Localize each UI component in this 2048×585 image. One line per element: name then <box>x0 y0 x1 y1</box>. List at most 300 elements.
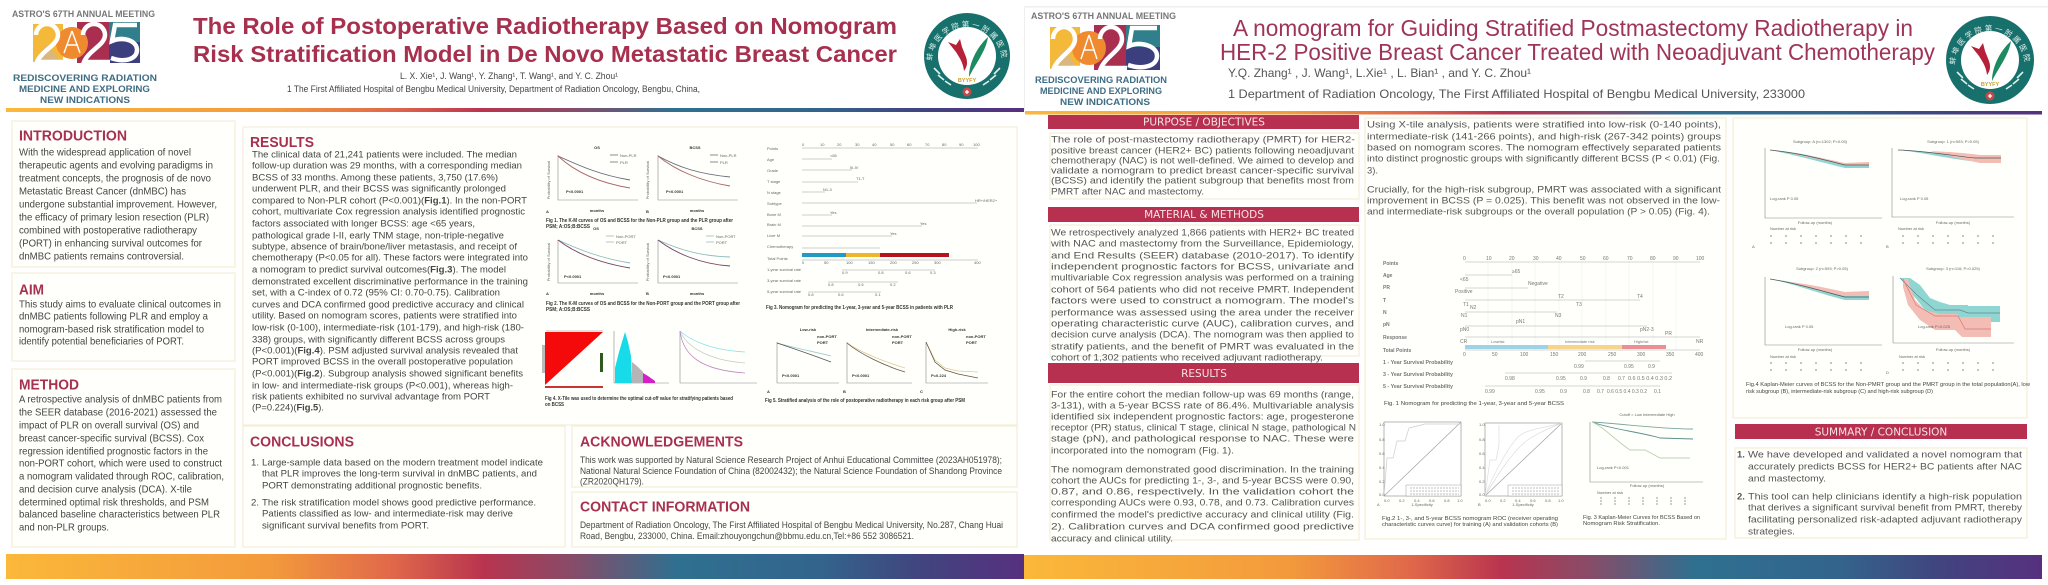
text: introduction body: treatment concepts, the prognosis of de novo <box>19 174 211 184</box>
text: results left body: accuracy and clinical utility. <box>1051 532 1173 544</box>
chart: nomogram poster 2: pN0 <box>1460 327 1469 333</box>
chart: nomogram poster 2: ≥65 <box>1512 269 1521 275</box>
chart: figure 2 KM curves: P<0.0001 <box>564 274 582 279</box>
text: summary body: 2. <box>1737 490 1745 502</box>
text: middle results body: Crucially, for the high-risk subgroup, PMRT was associated with a significant <box>1367 184 1721 194</box>
chart: figure 1 KM curves: BCSS <box>689 145 701 150</box>
chart: figure 3 nomogram: Bone M <box>767 212 781 217</box>
text: purpose body: (BCSS) and identify the patient subgroup that benefits most from <box>1051 174 1354 186</box>
chart: KM total population A: Follow-up (months) <box>1798 220 1833 225</box>
chart: nomogram poster 2: 1 - Year Survival Probability <box>1383 360 1453 366</box>
text: summary body <box>1737 448 2022 536</box>
text: results body: risk patients exhibited no survival advantage from PORT <box>252 392 490 402</box>
panel: results poster 1 <box>243 127 1017 425</box>
text: methods body <box>1050 226 1354 362</box>
chart: nomogram poster 2: N1 <box>1461 313 1468 319</box>
chart: nomogram poster 2: pN1 <box>1516 319 1525 325</box>
chart: figure 3 nomogram: T1-T <box>856 176 865 181</box>
icon: university emblem left <box>924 13 1010 99</box>
text: aim body: This study aims to evaluate clinical outcomes in <box>19 300 221 310</box>
text: acknowledgements body: National Natural Science Foundation of China (82002432); the Natural Science Foundation of Shandong Province <box>580 466 1002 477</box>
chart: figure 1 KM curves: months <box>690 208 705 213</box>
authors <box>287 71 700 94</box>
chart: figure 5 stratified KM: PORT <box>966 340 978 345</box>
text: middle results body: and intermediate-risk subgroups or the overall population (P > 0.05) (Fig. 4). <box>1367 206 1710 216</box>
text: aim body <box>19 300 221 348</box>
text: purpose body: PMRT after NAC and mastectomy. <box>1051 186 1204 196</box>
chart: figure 3 nomogram: Fig 3. Nomogram for predicting the 1-year, 3-year and 5-year BCSS in patients with PLR <box>766 305 953 311</box>
chart: KM high-risk D <box>1886 266 2014 375</box>
text: method body: breast cancer-specific survival (BCSS). Cox <box>19 434 204 444</box>
text: results body: (P=0.224)(Fig.5). <box>252 402 324 414</box>
chart: KM high-risk D: D <box>1886 370 1889 375</box>
chart: nomogram poster 2: 0.8 <box>1603 376 1610 382</box>
text: results body: utility. Based on nomogram scores, patients were stratified into <box>252 310 517 322</box>
text: methods body: cohort of 1,302 patients who received adjuvant radiotherapy. <box>1051 352 1323 362</box>
text: results body: curves and DCA confirmed good predictive accuracy and clinical <box>252 300 524 310</box>
text: aim body: identify potential beneficiaries of PORT. <box>19 336 184 348</box>
text: method body: a nomogram validated through ROC, calibration, <box>19 472 224 482</box>
chart: figure 5 stratified KM: non-PORT <box>892 334 912 339</box>
text: results body: demonstrated excellent discriminative performance in the training <box>252 276 528 288</box>
chart: ROC curves: 0.0 <box>1384 498 1390 503</box>
chart: figure 3 nomogram: HR+/HER2+ <box>975 198 998 203</box>
chart: figure 3 nomogram: N1-3 <box>823 187 832 192</box>
text: conclusions body: 2. <box>251 498 259 508</box>
text: method body: and decision curve analysis (DCA). X-tile <box>19 484 192 496</box>
chart: figure 2 KM curves: A <box>546 291 549 296</box>
chart: figure 3 KM risk strata: Follow-up (months) <box>1630 483 1665 488</box>
text: summary body: This tool can help clinicians identify a high-risk population <box>1748 490 2022 502</box>
chart: figure 3 KM risk strata: Cutoff = Low Intermediate High <box>1619 412 1675 417</box>
text: results body: a nomogram to predict survival outcomes(Fig.3). The model <box>252 264 506 276</box>
chart: figure 3 nomogram: Yes <box>920 221 927 226</box>
chart: ROC curves: A <box>1377 502 1380 507</box>
chart: figure 2 KM curves: PSM; A:OS;B:BCSS <box>546 307 591 313</box>
chart: figure 3 KM risk strata: Number at risk <box>1597 490 1623 495</box>
text: methods body: factors were used to construct a nomogram. The model's <box>1051 294 1354 306</box>
text: methods body: We retrospectively analyzed 1,866 patients with HER2+ BC treated <box>1051 226 1354 238</box>
caption: figure 4: Fig.4 Kaplan-Meier curves of BCSS for the Non-PMRT group and the PMRT group in the total population(A), low <box>1746 382 2031 388</box>
text: introduction body: undergone substantial improvement. However, <box>19 200 217 210</box>
chart: ROC curves: 0.0 <box>1479 492 1485 497</box>
text: method body: the SEER database (2016-2021) assessed the <box>19 408 217 418</box>
chart: figure 3 nomogram: Age <box>767 157 775 162</box>
chart: figure 2 KM curves: OS <box>593 226 599 231</box>
chart: nomogram poster 2: 0.95 <box>1624 364 1634 370</box>
chart: figure 5 stratified KM: non-PORT <box>966 334 986 339</box>
text: method body: and non-PLR groups. <box>19 522 109 534</box>
chart: figure 3 nomogram: N stage <box>767 190 782 195</box>
chart: figure 5 stratified KM: Fig 5. Stratified analysis of the role of postoperative radiotherapy in each risk group after PSM <box>765 398 965 404</box>
chart: figure 3 nomogram: <65 <box>830 153 838 158</box>
chart: KM high-risk D: Log-rank P=0.025 <box>1918 324 1951 329</box>
text: results body: subtype, absence of brain/bone/liver metastasis, and receipt of <box>252 242 517 252</box>
section: summary / conclusion <box>1735 424 2027 538</box>
chart: nomogram poster 2: CR <box>1460 339 1468 345</box>
text: purpose body <box>1051 134 1355 196</box>
text: conclusions body <box>251 458 543 532</box>
text: results body: BCSS of 33 months. Among these patients, 3,750 (17.6%) <box>252 172 498 184</box>
caption: figure 4 <box>1746 382 2031 395</box>
chart: figure 4 X-tile: Fig 4. X-Tile was used to determine the optimal cut-off value for stratifying patients based <box>545 396 733 402</box>
chart: ROC curves: 0.2 <box>1399 498 1405 503</box>
title <box>193 13 897 67</box>
text: summary body: and mastectomy. <box>1748 472 1826 484</box>
text: conclusions body: Patients classified as low- and intermediate-risk may derive <box>262 508 513 520</box>
text: results left body: 3-131), with a 5-year BCSS rate of 86.4%. Multivariable analysis <box>1051 400 1354 410</box>
text: results left body: The nomogram demonstrated good discrimination. In the training <box>1051 464 1354 474</box>
chart: figure 2 KM curves: Non-PORT <box>616 234 636 239</box>
chart: figure 3 nomogram: 0.6 <box>858 282 864 287</box>
chart: nomogram poster 2: 50 <box>1580 256 1586 262</box>
chart: figure 3 nomogram: 20 <box>837 142 842 147</box>
chart: figure 3 nomogram: 80 <box>942 142 947 147</box>
text: method body: impact of PLR on overall survival (OS) and <box>19 420 199 432</box>
title: A nomogram for Guiding Stratified Postmastectomy Radiotherapy in <box>1233 15 1913 41</box>
text: methods body: with NAC and mastectomy from the Surveillance, Epidemiology, <box>1050 238 1354 248</box>
chart: ROC curves: 0.4 <box>1479 465 1485 470</box>
chart: figure 3 nomogram: 0.8 <box>878 270 884 275</box>
chart: nomogram poster 2: 0.95 <box>1535 389 1545 395</box>
chart: figure 3 nomogram: III-IV <box>850 165 859 170</box>
chart: ROC curves: 1.0 <box>1457 498 1463 503</box>
text: purpose body: The role of post-mastectomy radiotherapy (PMRT) for HER2- <box>1051 134 1355 144</box>
chart: figure 5 stratified KM <box>765 327 988 404</box>
header bar: SUMMARY / CONCLUSION <box>1815 426 1947 438</box>
text: results left body: stage (pN), and pathological response to NAC. These were <box>1051 432 1354 444</box>
chart: figure 3 nomogram: 0.2 <box>890 282 896 287</box>
meeting logo right <box>1031 11 1176 108</box>
chart: figure 1 KM curves: months <box>590 208 605 213</box>
chart: figure 2 KM curves: Non-PORT <box>716 234 736 239</box>
meeting logo left: ASTRO'S 67TH ANNUAL MEETING <box>12 9 155 20</box>
text: middle results body: into distinct prognostic groups with significantly different BCSS (P < 0.01) (Fig. <box>1367 152 1720 164</box>
text: results body: compared to Non-PLR cohort (P<0.001)(Fig.1). In the non-PORT <box>252 196 527 206</box>
text: method body <box>19 394 224 534</box>
chart: figure 1 KM curves: P<0.0001 <box>566 189 584 194</box>
header bar <box>1048 363 1359 383</box>
chart: figure 3 nomogram: 60 <box>907 142 912 147</box>
chart: figure 5 stratified KM: Intermediate-risk <box>866 327 899 332</box>
text: methods body: decision curve analysis (DCA). The nomogram was then applied to <box>1051 328 1354 340</box>
text: summary body: We have developed and validated a novel nomogram that <box>1748 448 2022 460</box>
chart: figure 3 nomogram: 90 <box>959 142 964 147</box>
chart: ROC curves: 0.8 <box>1479 437 1485 442</box>
chart: nomogram poster 2: 0 <box>1463 256 1466 262</box>
text: results left body <box>1051 388 1356 544</box>
text: conclusions body: significant survival benefits from PORT. <box>262 520 429 532</box>
chart: figure 2 KM curves: months <box>690 291 705 296</box>
chart: figure 3 nomogram: 400 <box>974 260 981 265</box>
chart: figure 3 nomogram: 0.8 <box>828 282 834 287</box>
chart: nomogram poster 2: 0.9 <box>1648 364 1655 370</box>
chart: figure 3 nomogram: Yes <box>830 210 837 215</box>
authors: L. X. Xie¹, J. Wang¹, Y. Zhang¹, T. Wang¹, and Y. C. Zhou¹ <box>400 71 618 81</box>
chart: nomogram poster 2: 100 <box>1696 256 1705 262</box>
chart: ROC curves <box>1377 422 1564 528</box>
chart: nomogram poster 2: Negative <box>1528 281 1548 287</box>
chart: nomogram poster 2: Fig. 1 Nomogram for predicting the 1-year, 3-year and 5-year BCSS <box>1384 401 1564 407</box>
text: aim body: dnMBC patients following PLR and employ a <box>19 312 208 322</box>
chart: nomogram poster 2: 60 <box>1603 256 1609 262</box>
icon: university emblem left: 蚌埠医学院第一附属医院 <box>926 20 1008 60</box>
text: introduction body: combined with postoperative radiotherapy <box>19 226 198 236</box>
icon: university emblem right: 蚌埠医学院第一附属医院 <box>1948 24 2030 64</box>
text: middle results body: improvement in BCSS (P = 0.025). This benefit was not observed in the low- <box>1367 194 1720 206</box>
chart: figure 3 nomogram: T stage <box>767 179 781 184</box>
text: results left body: For the entire cohort the median follow-up was 69 months (range, <box>1051 388 1354 400</box>
chart: nomogram poster 2: 0.95 <box>1556 376 1566 382</box>
text: contact body: Road, Bengbu, 233000, China. Email:zhouyongchun@bbmu.edu.cn,Tel:+86 552 3086521. <box>580 531 914 542</box>
chart: KM total population A: A <box>1752 244 1755 249</box>
chart: KM intermediate-risk C: Log-rank P 0.05 <box>1785 324 1814 329</box>
chart: figure 3 nomogram: 250 <box>912 260 919 265</box>
chart: ROC curves: 0.2 <box>1500 498 1506 503</box>
chart: figure 5 stratified KM: A <box>767 389 770 394</box>
chart: ROC curves: 0.4 <box>1414 498 1420 503</box>
text: results body: underwent PLR, and their BCSS was significantly prolonged <box>252 184 506 194</box>
poster 2 header <box>1024 6 2048 110</box>
text: results body: 338) groups, with significantly different BCSS across groups <box>252 334 505 346</box>
chart: nomogram poster 2: 5 - Year Survival Probability <box>1383 384 1453 390</box>
panel: method <box>12 369 235 547</box>
chart: figure 3 nomogram: 40 <box>872 142 877 147</box>
header bar: PURPOSE / OBJECTIVES <box>1143 116 1265 128</box>
chart: ROC curves: 1-Specificity <box>1512 502 1534 507</box>
meeting logo left: NEW INDICATIONS <box>40 95 130 106</box>
chart: KM intermediate-risk C <box>1765 266 1882 370</box>
meeting logo left: REDISCOVERING RADIATION <box>13 73 157 84</box>
panel: middle results <box>1365 118 1726 539</box>
chart: figure 3 KM risk strata <box>1583 412 1703 527</box>
text: method body: regression identified prognostic factors in the <box>19 446 208 458</box>
text: conclusions body: that PLR improves the long-term survival in dnMBC patients, and <box>262 468 537 480</box>
text: results body: low-risk (0-100), intermediate-risk (101-179), and high-risk (180- <box>252 322 524 334</box>
text: contact body: Department of Radiation Oncology, The First Affiliated Hospital of Bengbu Medical University, No.287, Chang Huai <box>580 520 1003 531</box>
chart: nomogram poster 2: 10 <box>1486 256 1492 262</box>
chart: figure 2 KM curves: PORT <box>616 240 628 245</box>
text: acknowledgements body: This work was supported by Natural Science Research Project of Anhui Educational Committee (2023AH051978); <box>580 455 1002 466</box>
text: middle results body: intermediate-risk (141-266 points), and high-risk (267-342 points) groups <box>1367 130 1721 142</box>
chart: nomogram poster 2: 30 <box>1533 256 1539 262</box>
text: methods body: and End Results (SEER) database (2010-2017). To identify <box>1051 250 1354 260</box>
chart: figure 3 nomogram: 0.6 <box>838 292 844 297</box>
panel: right KM curves <box>1733 118 2031 418</box>
text: results body: follow-up duration was 29 months, with a corresponding median <box>252 160 522 172</box>
chart: figure 2 KM curves: Fig 2. The K-M curves of OS and BCSS for the Non-PORT group and the PORT group after <box>546 301 740 307</box>
panel: acknowledgements <box>572 426 1017 488</box>
text: summary body: facilitating personalized risk-adapted adjuvant radiotherapy <box>1748 514 2022 524</box>
chart: nomogram poster 2: 0.7 <box>1618 376 1625 382</box>
chart: KM low-risk B: Log-rank P 0.05 <box>1900 196 1929 201</box>
chart: nomogram poster 2: 3 - Year Survival Probability <box>1383 372 1453 378</box>
text: middle results body: 3). <box>1367 164 1378 176</box>
text: results body: (P<0.001)(Fig.4). PSM adjusted survival analysis revealed that <box>252 346 518 356</box>
chart: ROC curves: 0.6 <box>1379 451 1385 456</box>
text: results body: The clinical data of 21,241 patients were included. The median <box>252 150 517 160</box>
text: contact body <box>580 520 1003 542</box>
chart: ROC curves: 0.2 <box>1479 479 1485 484</box>
chart: nomogram poster 2: N2 <box>1470 305 1477 311</box>
chart: figure 3 nomogram: 3-year survival rate <box>767 278 802 283</box>
heading: method: METHOD <box>19 378 79 394</box>
chart: figure 5 stratified KM: P=0.224 <box>931 373 947 378</box>
chart: figure 5 stratified KM: PORT <box>892 340 904 345</box>
text: purpose body: validate a nomogram to predict breast cancer-specific survival <box>1051 164 1354 176</box>
text: method body: determined optimal risk thresholds, and PSM <box>19 498 209 508</box>
chart: nomogram poster 2: 80 <box>1650 256 1656 262</box>
chart: figure 3 nomogram: Total Points <box>767 256 788 261</box>
text: summary body: strategies. <box>1748 526 1795 536</box>
chart: figure 2 KM curves: PORT <box>716 240 728 245</box>
chart: figure 3 nomogram: Brain M <box>767 222 781 227</box>
chart: nomogram poster 2: 0.99 <box>1485 389 1495 395</box>
chart: figure 3 nomogram: Chemotherapy <box>767 244 793 249</box>
chart: nomogram poster 2: 150 <box>1550 352 1559 358</box>
chart: ROC curves: 0.8 <box>1545 498 1551 503</box>
heading: contact information: CONTACT INFORMATION <box>580 500 750 516</box>
text: methods body: multivariable Cox regression analysis was performed on a training <box>1051 272 1354 282</box>
chart: nomogram poster 2: 0.6 0.5 0.4 0.3 0.2 <box>1628 376 1672 382</box>
chart: figure 3 nomogram: 0.1 <box>875 292 881 297</box>
chart: ROC curves: 0.4 <box>1515 498 1521 503</box>
section: purpose / objectives <box>1048 115 1359 199</box>
top gradient bar poster 2 <box>1025 111 2042 114</box>
text: conclusions body: 1. <box>251 458 259 468</box>
text: summary body: that derives a significant survival benefit from PMRT, thereby <box>1748 502 2022 512</box>
chart: figure 3 nomogram: 50 <box>824 260 829 265</box>
chart: nomogram poster 2: T <box>1383 298 1386 304</box>
chart: nomogram poster 2: T2 <box>1558 294 1564 300</box>
header bar <box>1735 424 2027 439</box>
header bar: RESULTS <box>1181 368 1227 380</box>
chart: KM intermediate-risk C: Follow-up (months) <box>1798 347 1833 352</box>
chart: ROC curves: 1.0 <box>1479 422 1485 427</box>
text: purpose body: chemotherapy (NAC) is not well-defined. We aimed to develop and <box>1051 154 1354 166</box>
chart: figure 1 KM curves: PLR <box>720 160 728 165</box>
chart: nomogram poster 2: pN <box>1383 322 1390 328</box>
chart: figure 3 nomogram: Grade <box>767 168 779 173</box>
top gradient bar poster 1 <box>6 108 1024 112</box>
heading: aim: AIM <box>19 282 44 298</box>
text: introduction body: therapeutic agents and evolving paradigms in <box>19 160 213 172</box>
text: results left body: identified six independent prognostic factors: age, progesterone <box>1051 410 1354 422</box>
text: methods body: performance was assessed using the area under the receiver <box>1051 306 1354 318</box>
chart: ROC curves: 0.8 <box>1379 437 1385 442</box>
chart: figure 3 nomogram: Subtype <box>767 201 782 206</box>
chart: ROC curves: 0.4 <box>1379 465 1385 470</box>
meeting logo right: REDISCOVERING RADIATION <box>1035 75 1167 86</box>
bottom gradient bar poster 1 <box>6 554 1024 579</box>
title: HER-2 Positive Breast Cancer Treated with Neoadjuvant Chemotherapy <box>1220 39 1935 65</box>
chart: ROC curves: characteristic curves curve) for training (A) and validation cohorts (B) <box>1382 522 1558 528</box>
header bar <box>1048 115 1359 129</box>
chart: figure 2 KM curves <box>546 226 740 313</box>
chart: nomogram poster 2: <65 <box>1460 277 1469 283</box>
icon: 2025 logo <box>33 22 140 63</box>
chart: nomogram poster 2: PR <box>1383 285 1390 291</box>
chart: figure 1 KM curves: Probability of Survival <box>546 161 551 199</box>
chart: figure 5 stratified KM: Low-risk <box>800 327 817 332</box>
authors: Y.Q. Zhang¹ , J. Wang¹, L.Xie¹ , L. Bian¹ , and Y. C. Zhou¹ <box>1228 66 1531 80</box>
chart: figure 1 KM curves: Fig 1. The K-M curves of OS and BCSS for the Non-PLR group and the PLR group after <box>546 218 733 224</box>
title <box>1220 15 1935 65</box>
chart: nomogram poster 2: 90 <box>1673 256 1679 262</box>
section: results poster 2 <box>1048 363 1359 544</box>
chart: ROC curves: 0.0 <box>1379 492 1385 497</box>
chart: figure 2 KM curves: B <box>646 291 649 296</box>
meeting logo right: NEW INDICATIONS <box>1060 97 1150 108</box>
chart: figure 2 KM curves: BCSS <box>691 226 703 231</box>
chart: figure 3 nomogram: Liver M <box>767 233 780 238</box>
header bar <box>1048 207 1359 222</box>
chart: figure 3 nomogram: 70 <box>925 142 930 147</box>
chart: KM high-risk D: Follow-up (months) <box>1936 347 1971 352</box>
chart: figure 5 stratified KM: P<0.0001 <box>852 373 870 378</box>
icon: university emblem right <box>1946 16 2034 104</box>
chart: ROC curves: 0.8 <box>1444 498 1450 503</box>
text: results body: in low- and intermediate-risk groups (P<0.001), whereas high- <box>252 380 513 392</box>
chart: nomogram poster 2: Points <box>1383 261 1398 267</box>
chart: ROC curves: 0.6 <box>1429 498 1435 503</box>
authors: 1 Department of Radiation Oncology, The First Affiliated Hospital of Bengbu Medical University, 233000 <box>1228 87 1805 101</box>
heading: results: RESULTS <box>250 135 314 151</box>
text: results left body: 2). Calibration curves and DCA confirmed good predictive <box>1051 520 1354 532</box>
chart: figure 3 nomogram: 300 <box>934 260 941 265</box>
chart: figure 1 KM curves: PLR <box>620 160 628 165</box>
meeting logo right: ASTRO'S 67TH ANNUAL MEETING <box>1031 11 1176 22</box>
text: methods body: stratify patients, and the benefit of PMRT was evaluated in the <box>1051 340 1354 352</box>
chart: nomogram poster 2: Intermediate risk <box>1565 339 1595 344</box>
chart: figure 1 KM curves: PSM; A:OS;B:BCSS <box>546 224 591 230</box>
chart: figure 2 KM curves: Probability of Survival <box>645 243 650 281</box>
chart: nomogram poster 2: Positive <box>1455 289 1473 295</box>
text: middle results body <box>1367 118 1721 216</box>
chart: KM total population A: Subgroup: A (n=1302; P>0.05) <box>1793 139 1848 144</box>
chart: KM total population A: Log-rank P 0.05 <box>1770 196 1799 201</box>
text: results left body: incorporated into the nomogram (Fig. 1). <box>1051 444 1234 456</box>
text: methods body: cohort of 564 patients who did not receive PMRT. Independent <box>1051 284 1354 294</box>
chart: nomogram poster 2: 0.98 <box>1505 376 1515 382</box>
text: results body <box>252 150 528 414</box>
meeting logo right: MEDICINE AND EXPLORING <box>1040 86 1162 97</box>
chart: nomogram poster 2: 0.9 <box>1580 376 1587 382</box>
chart: figure 3 nomogram: 150 <box>868 260 875 265</box>
chart: figure 2 KM curves: Probability of Survival <box>546 243 551 281</box>
chart: KM low-risk B: Subgroup: 1 (n=593; P>0.05) <box>1927 139 1980 144</box>
chart: figure 1 KM curves: Probability of Survival <box>645 161 650 199</box>
chart: ROC curves: 0.2 <box>1379 479 1385 484</box>
chart: KM low-risk B: Follow-up (months) <box>1936 220 1971 225</box>
text: introduction body: With the widespread application of novel <box>19 148 191 158</box>
panel: contact information <box>572 492 1017 547</box>
text: introduction body: dnMBC patients remains controversial. <box>19 252 184 262</box>
heading: introduction: INTRODUCTION <box>19 128 127 144</box>
chart: KM low-risk B <box>1886 139 2014 249</box>
chart: figure 5 stratified KM: C <box>920 389 923 394</box>
chart: nomogram poster 2: pN2-3 <box>1640 327 1654 333</box>
chart: figure 2 KM curves: P<0.0001 <box>663 274 681 279</box>
chart: nomogram poster 2: 300 <box>1637 352 1646 358</box>
chart: nomogram poster 2: Lowrisk <box>1491 339 1505 344</box>
chart: ROC curves: 0.6 <box>1479 451 1485 456</box>
chart: nomogram poster 2: 250 <box>1608 352 1617 358</box>
chart: nomogram poster 2: 50 <box>1492 352 1498 358</box>
text: results left body: confirmed the model's predictive accuracy and clinical utility (Fig. <box>1051 508 1354 520</box>
text: method body: non-PORT cohort, which were used to construct <box>19 458 222 470</box>
chart: nomogram poster 2: 70 <box>1627 256 1633 262</box>
